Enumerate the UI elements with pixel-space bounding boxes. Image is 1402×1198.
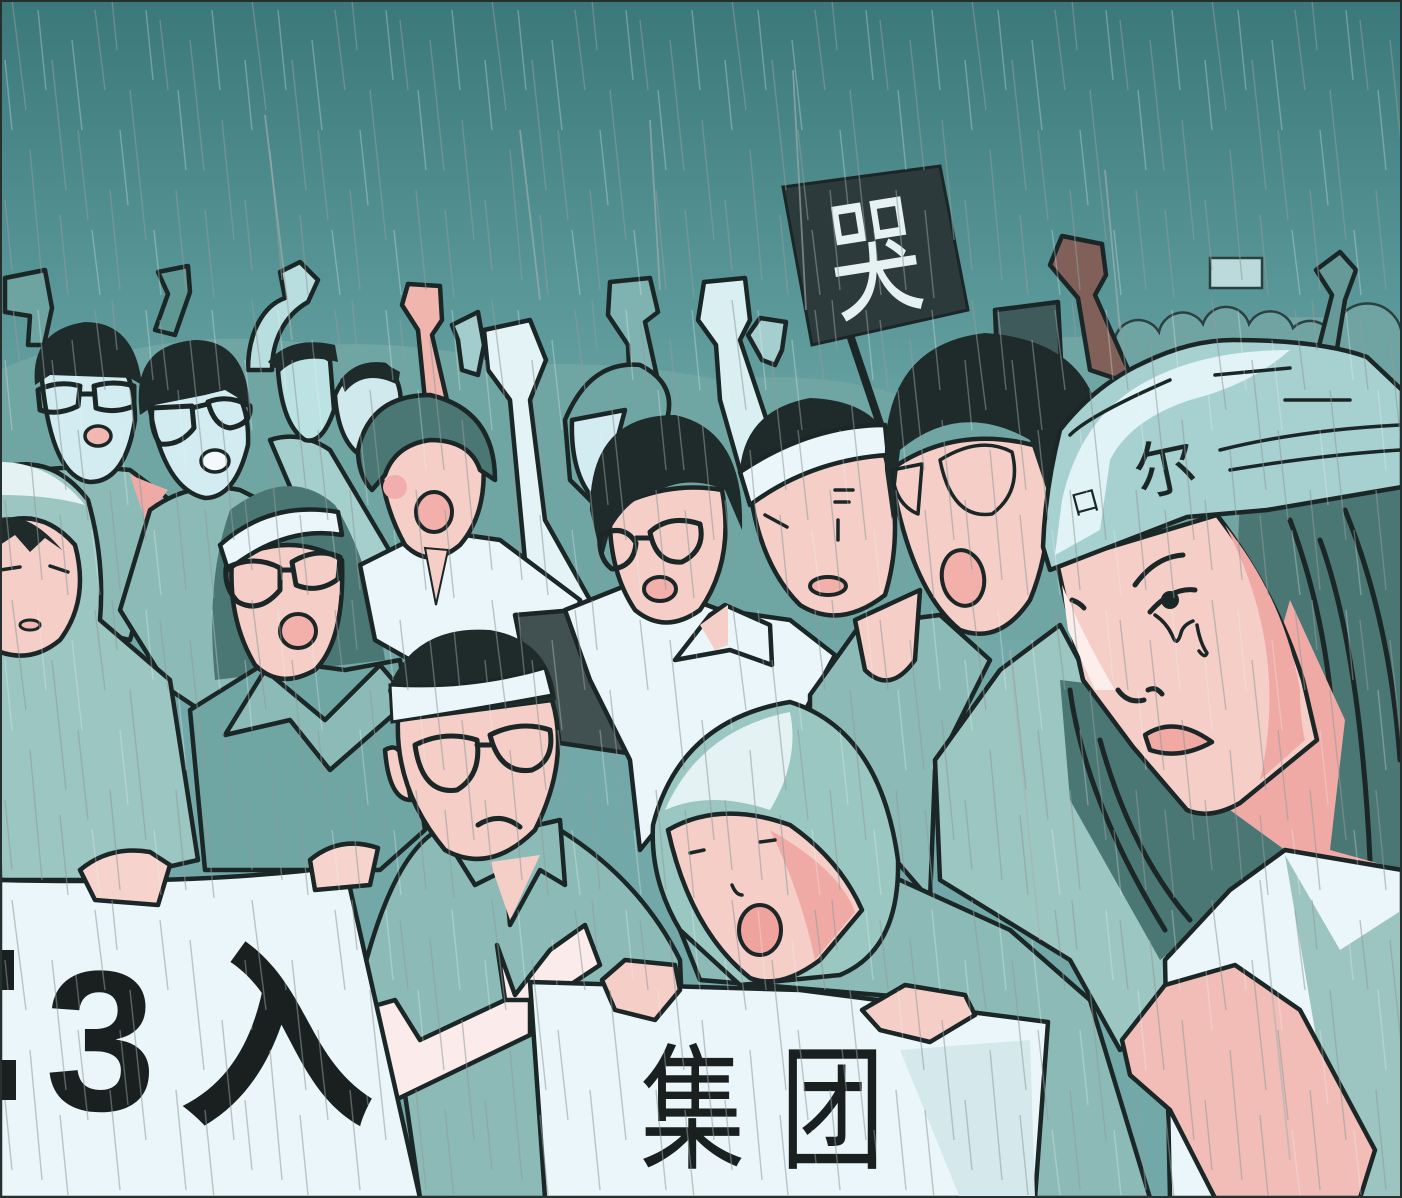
distant crowd bbox=[0, 304, 1402, 640]
hand left bbox=[602, 960, 680, 1020]
arm and fist: centre back bbox=[402, 284, 447, 400]
eyes and mouth bbox=[0, 566, 68, 572]
hair bbox=[590, 415, 742, 560]
face bbox=[150, 372, 248, 498]
arm and fist: pale arm bbox=[698, 278, 770, 470]
hand raised bbox=[497, 925, 600, 1000]
hood light top bbox=[0, 462, 85, 505]
face highlight bbox=[1062, 585, 1115, 690]
hair bbox=[740, 398, 890, 470]
headband bbox=[220, 509, 342, 570]
face bbox=[231, 545, 342, 679]
arm and fist: dark arm bbox=[1050, 236, 1135, 385]
protest sign with character bbox=[783, 166, 968, 430]
red shirt patch bbox=[130, 475, 168, 520]
face bbox=[890, 439, 1051, 634]
headband wrap bbox=[1043, 340, 1402, 570]
hair bbox=[388, 630, 556, 720]
fist: small right bbox=[748, 318, 786, 365]
hood highlight bbox=[665, 712, 792, 810]
hair bbox=[885, 333, 1100, 520]
body bbox=[680, 880, 1150, 1198]
pupil bbox=[1161, 591, 1179, 609]
body bbox=[935, 625, 1180, 1050]
hair bbox=[268, 342, 338, 372]
main woman foreground right bbox=[1043, 340, 1402, 1198]
back men in crowd bbox=[268, 342, 401, 600]
body bbox=[810, 615, 990, 900]
hand left bbox=[80, 850, 170, 905]
body bbox=[360, 825, 690, 1198]
body bbox=[270, 437, 395, 600]
arm and fist: back centre left bbox=[248, 262, 318, 370]
dark distant placard bbox=[995, 302, 1062, 380]
long hair bbox=[1060, 470, 1402, 960]
glasses boy in white shirt bbox=[565, 415, 835, 850]
sign character: 哭 bbox=[819, 180, 931, 340]
mouth bbox=[85, 426, 111, 446]
mouth bbox=[739, 905, 781, 955]
back row man two with glasses bbox=[120, 340, 330, 730]
mouth bbox=[201, 450, 229, 472]
sign stick bbox=[850, 335, 882, 430]
eyes and tear bbox=[765, 490, 853, 540]
hood bbox=[653, 702, 898, 985]
fist: back left bbox=[155, 266, 190, 335]
second hair bbox=[340, 363, 400, 392]
hand right bbox=[310, 844, 378, 890]
hair bbox=[358, 395, 495, 490]
nose bbox=[1118, 689, 1162, 701]
headband bbox=[390, 668, 552, 722]
second face bbox=[335, 364, 401, 455]
fist: far left bbox=[5, 270, 52, 345]
glasses bbox=[892, 445, 1014, 515]
mouth bbox=[644, 577, 676, 601]
fist: middle top bbox=[608, 278, 660, 390]
headband highlight bbox=[1055, 350, 1290, 555]
neck bbox=[1230, 600, 1402, 870]
cheek bbox=[383, 475, 407, 499]
boy shouting in white shirt bbox=[358, 395, 580, 700]
banner text: 3入 bbox=[45, 930, 396, 1153]
brush mark far left bbox=[0, 950, 16, 1100]
white shirt bbox=[360, 530, 580, 700]
face bbox=[398, 700, 558, 859]
collar bbox=[675, 605, 772, 665]
mouth bbox=[810, 577, 846, 595]
shouting man with aviator glasses bbox=[885, 333, 1180, 1050]
raised fists bbox=[5, 236, 1356, 620]
hair bbox=[139, 340, 250, 415]
glasses bbox=[38, 383, 134, 412]
headband small character: 口 bbox=[1068, 484, 1103, 521]
collar bbox=[450, 820, 565, 925]
collar bbox=[225, 665, 410, 770]
ears bbox=[385, 728, 559, 800]
face bbox=[610, 488, 726, 622]
body bbox=[190, 660, 425, 870]
banner shading bbox=[900, 1040, 1035, 1198]
fringe bbox=[0, 517, 62, 552]
hoodie person shouting bbox=[653, 702, 1150, 1198]
neck bbox=[490, 855, 540, 920]
hood and body bbox=[0, 464, 198, 880]
shirt bbox=[1165, 850, 1402, 1198]
face bbox=[380, 435, 484, 558]
fist: centre small bbox=[452, 312, 484, 375]
body bbox=[120, 488, 330, 730]
raised forearm bbox=[360, 990, 530, 1105]
hair strands bbox=[1070, 510, 1400, 930]
dark placard behind bbox=[515, 610, 640, 755]
face bbox=[0, 518, 80, 656]
neck bbox=[855, 590, 920, 680]
mouth bbox=[416, 492, 452, 532]
neck tie bbox=[425, 548, 448, 605]
shirt bbox=[565, 580, 835, 850]
body bbox=[40, 468, 170, 640]
left hooded person bbox=[0, 462, 198, 880]
face bbox=[42, 348, 135, 482]
headband bbox=[740, 425, 888, 505]
headband fold lines bbox=[1070, 368, 1400, 470]
mouth bbox=[1145, 726, 1212, 754]
cheek bbox=[770, 830, 855, 960]
headband woman bbox=[190, 486, 425, 870]
hand right bbox=[862, 985, 975, 1042]
headband boy with tear bbox=[740, 398, 990, 900]
headband character: 尔 bbox=[1128, 429, 1203, 510]
left banner bbox=[0, 844, 420, 1198]
arm and fist: far right bbox=[1316, 252, 1356, 355]
centre banner bbox=[530, 960, 1048, 1198]
person at back centre bbox=[565, 365, 669, 510]
tears bbox=[1155, 615, 1207, 656]
mouth bbox=[937, 547, 989, 609]
back row man with glasses bbox=[35, 322, 170, 640]
glasses bbox=[415, 726, 551, 790]
small distant placard bbox=[1210, 258, 1262, 288]
eyes bbox=[690, 840, 775, 895]
woman's hand clutching shirt bbox=[1122, 965, 1375, 1198]
cheek shade bbox=[1225, 525, 1305, 780]
neck bbox=[700, 605, 728, 650]
glasses bbox=[600, 520, 701, 569]
arm and fist: centre main bbox=[484, 320, 590, 620]
hair bbox=[212, 486, 385, 680]
glasses bbox=[152, 399, 250, 444]
mouth bbox=[280, 614, 316, 648]
mouth bbox=[478, 818, 520, 827]
banner cloth bbox=[0, 866, 420, 1198]
face bbox=[668, 814, 862, 981]
face bbox=[278, 352, 334, 441]
glasses bbox=[226, 553, 340, 606]
shirt shade bbox=[1285, 855, 1402, 1198]
front boy with headband and glasses bbox=[360, 630, 690, 1198]
hair bbox=[35, 322, 142, 385]
eyes bbox=[1072, 555, 1195, 612]
face bbox=[750, 454, 895, 615]
banner text: 集团 bbox=[640, 1035, 920, 1187]
banner cloth bbox=[530, 982, 1048, 1198]
face bbox=[1057, 515, 1317, 814]
sign board bbox=[783, 166, 968, 345]
